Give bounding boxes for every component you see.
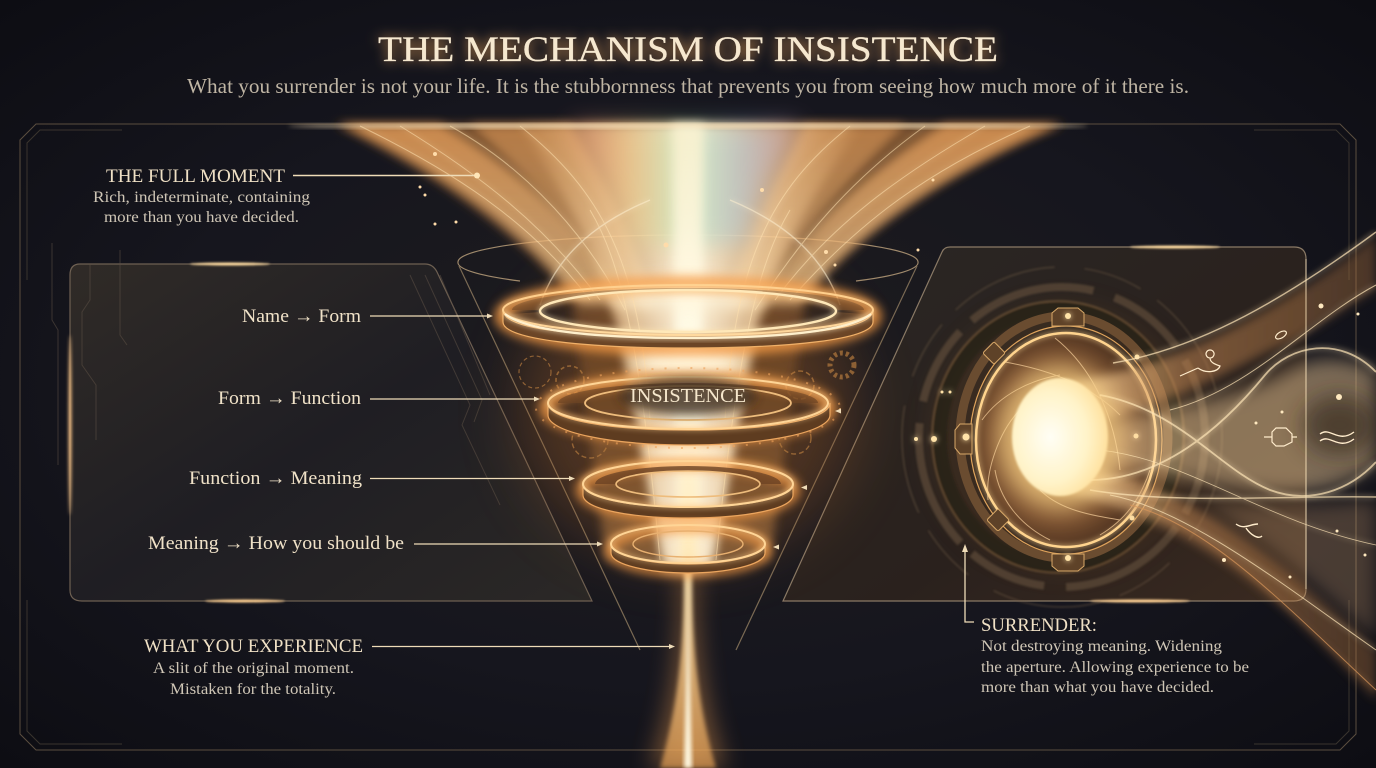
light fan from full moment xyxy=(288,124,1088,570)
warm glow behind funnel xyxy=(518,260,858,560)
label: function to meaning xyxy=(189,468,575,489)
bright core xyxy=(1012,378,1108,496)
sparks around the funnel xyxy=(418,152,934,266)
aperture mechanism xyxy=(902,267,1222,607)
tail: narrow experience slit xyxy=(650,565,726,768)
callout: what you experience xyxy=(144,637,675,698)
callout: surrender: more than what you have decided. xyxy=(981,679,1214,696)
ring 4: meaning to how you should be xyxy=(610,525,766,573)
small symbols in flow xyxy=(1180,329,1354,537)
label: meaning to how you should be xyxy=(148,533,603,554)
iris blades xyxy=(982,338,1150,540)
insistence label: INSISTENCE xyxy=(630,385,746,407)
arrow: surrender to ring 4 xyxy=(773,544,890,550)
panel edge over light xyxy=(1305,259,1307,589)
panel: right glass panel xyxy=(783,246,1306,602)
subtitle: What you surrender is not your life. It is the stubbornness that prevents you from seeing how much more of it there is. xyxy=(187,74,1189,98)
label: form to function xyxy=(218,388,540,409)
particles xyxy=(1222,304,1366,578)
studs xyxy=(914,313,1140,561)
bright pools between rings xyxy=(618,281,758,529)
callout: what you experience: WHAT YOU EXPERIENCE xyxy=(144,637,363,657)
funnel outline xyxy=(458,235,918,650)
panel: left glass panel xyxy=(52,243,592,602)
callout: what you experience: A slit of the original moment. xyxy=(153,660,354,677)
callout: surrender xyxy=(962,544,1249,696)
callout: the full moment: THE FULL MOMENT xyxy=(106,167,285,187)
label backing behind insistence xyxy=(620,377,756,415)
callout: the full moment: Rich, indeterminate, containing xyxy=(93,189,310,206)
ring 3: function to meaning xyxy=(582,461,794,518)
title: THE MECHANISM OF INSISTENCE xyxy=(378,29,998,69)
label: name to form: Name → Form xyxy=(242,306,361,327)
callout: surrender: Not destroying meaning. Widening xyxy=(981,638,1222,655)
label: meaning to how you should be: Meaning → How you should be xyxy=(148,533,404,554)
label: form to function: Form → Function xyxy=(218,388,362,409)
ring 2: form to function xyxy=(536,368,840,448)
callout: the full moment xyxy=(93,167,480,226)
outer frame xyxy=(20,124,1356,750)
light streams through aperture xyxy=(998,232,1376,700)
label: name to form xyxy=(242,306,493,327)
callout: the full moment: more than you have decided. xyxy=(104,209,299,226)
ring 1: name to form xyxy=(502,284,874,348)
callout: what you experience: Mistaken for the totality. xyxy=(170,681,336,698)
gears and mechanism details xyxy=(519,353,854,458)
light strands xyxy=(360,126,1030,560)
label: function to meaning: Function → Meaning xyxy=(189,468,363,489)
arrow: surrender to ring 3 xyxy=(801,485,900,490)
bracket tabs xyxy=(955,308,1084,571)
callout: surrender: SURRENDER: xyxy=(981,616,1097,636)
callout: surrender: the aperture. Allowing experience to be xyxy=(981,659,1249,676)
arrow: surrender to ring 2 xyxy=(835,408,905,414)
